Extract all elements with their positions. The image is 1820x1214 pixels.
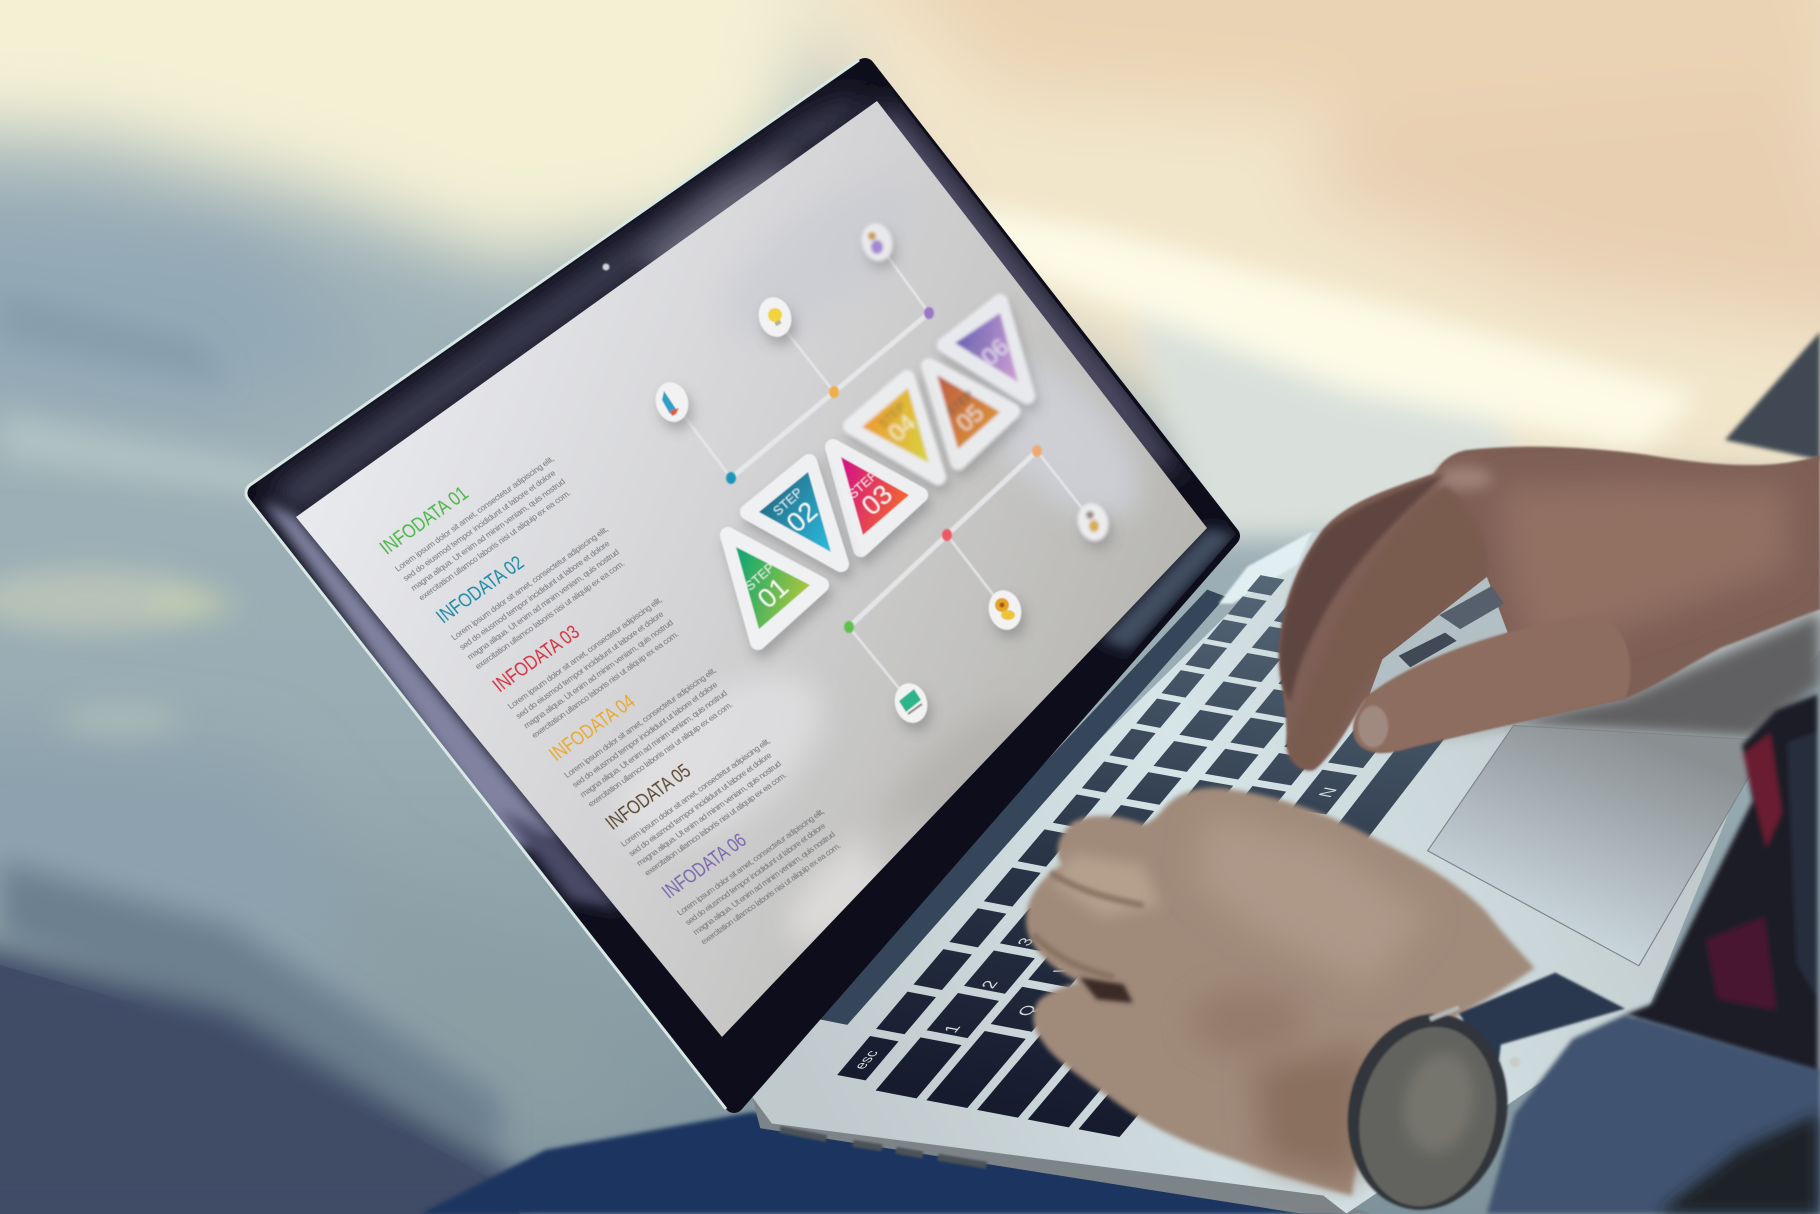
step 06 triangle (945, 302, 1027, 396)
watch (1330, 973, 1625, 1214)
text block: INFODATA 02: sed do eiusmod tempor incididunt ut labore et dolore (457, 538, 612, 652)
connector dots (726, 307, 1042, 633)
index finger (1287, 486, 1488, 770)
text block: INFODATA 05 (600, 713, 796, 878)
connector lines (672, 242, 1093, 703)
screen background (296, 101, 1207, 1037)
knuckle highlight (1437, 467, 1493, 490)
laptop base (752, 532, 1820, 1214)
icon badge: monitor (890, 680, 932, 726)
camera dot (602, 264, 610, 270)
blotch on back of hand (1192, 991, 1303, 1052)
row 5 keys (1037, 609, 1481, 1123)
clothing and hands (1026, 447, 1820, 1214)
step 05 triangle (929, 366, 1012, 462)
finger gap (1079, 977, 1133, 1003)
gap with keys between finger and thumb (1370, 577, 1508, 694)
hand shadow on deck (1404, 613, 1820, 743)
text block: INFODATA 01 (374, 431, 580, 602)
watch strap (1459, 973, 1625, 1074)
upper timeline (731, 313, 929, 478)
text block: INFODATA 02: magna aliqua. Ut enim ad minim veniam, quis nostrud (465, 547, 621, 661)
icon badge: yellow target (984, 587, 1026, 633)
text block: INFODATA 03: Lorem ipsum dolor sit amet, consectetur adipiscing elit, (506, 595, 664, 711)
dot: red (942, 529, 952, 541)
text block: INFODATA 03: magna aliqua. Ut enim ad minim veniam, quis nostrud (521, 617, 675, 730)
step 05 triangle: 05 (951, 399, 989, 437)
text block: INFODATA 04 (544, 643, 742, 809)
left hand (1026, 788, 1534, 1196)
screen soft smudges (622, 239, 1144, 953)
watch case (1330, 999, 1525, 1214)
trackpad (1428, 725, 1770, 966)
key labels: W (1049, 958, 1079, 975)
text block: INFODATA 01: Lorem ipsum dolor sit amet, consectetur adipiscing elit, (393, 454, 556, 573)
step 01 triangle: 01 (752, 572, 794, 614)
watch dial (1343, 1014, 1512, 1214)
deck surface (752, 532, 1820, 1214)
text block: INFODATA 04: sed do eiusmod tempor incididunt ut labore et dolore (570, 679, 720, 789)
plaid shirt (1625, 694, 1818, 1074)
text block: INFODATA 06 (656, 784, 850, 946)
sleeve (1487, 1014, 1820, 1214)
icon badge: rocket (651, 379, 693, 425)
lower timeline (849, 451, 1037, 627)
text block: INFODATA 01: magna aliqua. Ut enim ad minim veniam, quis nostrud (409, 476, 567, 593)
text block: INFODATA 03: exercitation ullamco laboris nisi ut aliquip ex ea com. (529, 629, 681, 740)
key labels: 3 (1012, 936, 1038, 947)
text block: INFODATA 02: Lorem ipsum dolor sit amet, consectetur adipiscing elit, (449, 524, 610, 642)
jeans (420, 1112, 1350, 1214)
text block: INFODATA 06: sed do eiusmod tempor incididunt ut labore et dolore (683, 820, 828, 927)
thumb nail (1358, 706, 1388, 747)
laptop screen (296, 101, 1207, 1037)
icon badge: person with purple shirt (858, 220, 896, 264)
silver rim (246, 60, 859, 1109)
text block: INFODATA 03: INFODATA 03 (489, 622, 584, 697)
bezel reflections (262, 100, 1236, 910)
laptop lid (246, 60, 1236, 1109)
dark ground base (0, 965, 520, 1214)
bench corner top right (1725, 332, 1820, 460)
text block: INFODATA 06: magna aliqua. Ut enim ad minim veniam, quis nostrud (691, 829, 837, 937)
key labels: 2 (976, 979, 1002, 990)
thumb (1353, 615, 1631, 752)
watch dial light (1395, 1045, 1484, 1160)
step 03 triangle: 03 (856, 479, 898, 521)
key labels: Q (1013, 1003, 1041, 1017)
key labels: 1 (939, 1023, 965, 1034)
lower stems (849, 451, 1093, 703)
hinge strip (807, 590, 1226, 1025)
step 01 triangle (728, 535, 821, 642)
text block: INFODATA 06: Lorem ipsum dolor sit amet, consectetur adipiscing elit, (675, 806, 826, 917)
text block: INFODATA 05: magna aliqua. Ut enim ad minim veniam, quis nostrud (634, 758, 783, 868)
side ports (780, 1129, 987, 1165)
row 3 keys (941, 590, 1380, 1104)
text block: INFODATA 04: exercitation ullamco laboris nisi ut aliquip ex ea com. (586, 699, 735, 809)
text block: INFODATA 02: exercitation ullamco laboris nisi ut aliquip ex ea com. (473, 558, 627, 671)
text block: INFODATA 02 (431, 502, 634, 671)
step 04 triangle: STEP (876, 399, 908, 431)
text block: INFODATA 05: INFODATA 05 (602, 760, 695, 834)
step 04 triangle: 04 (883, 409, 921, 447)
step 03 triangle: STEP (845, 468, 880, 502)
text block: INFODATA 06: INFODATA 06 (658, 830, 751, 903)
icon badge: light bulb (754, 294, 796, 340)
step 02 triangle: STEP (770, 485, 805, 519)
back of right hand highlight (1497, 482, 1787, 656)
text block: INFODATA 01: exercitation ullamco laboris nisi ut aliquip ex ea com. (416, 488, 573, 602)
left hand base (1026, 788, 1534, 1196)
text block: INFODATA 04: magna aliqua. Ut enim ad minim veniam, quis nostrud (578, 688, 729, 799)
step 01 triangle: STEP (742, 560, 777, 594)
slide text list (374, 431, 862, 946)
row 6 keys (1085, 618, 1532, 1133)
right hand base (1279, 447, 1820, 770)
dot: green (844, 621, 854, 633)
dot: light orange (1032, 445, 1042, 457)
step 02 triangle (748, 462, 841, 564)
text block: INFODATA 01: INFODATA 01 (376, 483, 473, 559)
watch lug highlight (1509, 1057, 1520, 1067)
finger creases (1033, 873, 1143, 977)
key labels: N (1314, 786, 1342, 799)
text block: INFODATA 05: exercitation ullamco laboris nisi ut aliquip ex ea com. (642, 770, 789, 878)
keys seen between fingers (1439, 586, 1504, 629)
finger highlight (1050, 853, 1161, 917)
step 05 triangle: STEP (944, 387, 976, 419)
text block: INFODATA 02: INFODATA 02 (432, 552, 529, 628)
step 02 triangle: 02 (781, 496, 823, 538)
dot: orange (829, 386, 839, 398)
row 1 keys (850, 572, 1278, 1078)
step 06 triangle: STEP (966, 327, 998, 359)
text block: INFODATA 04: INFODATA 04 (545, 691, 640, 765)
keyboard (837, 571, 1532, 1133)
far finger shadow (1280, 474, 1445, 702)
text block: INFODATA 05: sed do eiusmod tempor incididunt ut labore et dolore (626, 750, 774, 858)
text block: INFODATA 01: sed do eiusmod tempor incididunt ut labore et dolore (401, 468, 558, 583)
shadow on wrist side (1254, 1045, 1370, 1184)
row 2 keys (893, 581, 1329, 1094)
text block: INFODATA 05: Lorem ipsum dolor sit amet, consectetur adipiscing elit, (618, 736, 772, 849)
text block: INFODATA 03: sed do eiusmod tempor incididunt ut labore et dolore (513, 609, 666, 721)
text block: INFODATA 04: Lorem ipsum dolor sit amet, consectetur adipiscing elit, (562, 665, 718, 780)
right hand (1279, 447, 1820, 770)
step 06 triangle: 06 (976, 333, 1014, 371)
step 03 triangle (833, 447, 920, 549)
icon badge: person with chart (1074, 500, 1112, 544)
deck side edge (752, 1097, 1370, 1214)
upper stems (672, 242, 929, 478)
text block: INFODATA 03 (487, 572, 688, 740)
key labels: esc (851, 1049, 883, 1070)
row 4 keys (989, 600, 1430, 1114)
key labels (851, 747, 1342, 1109)
dot: blue (726, 472, 736, 484)
background stripes (0, 290, 230, 385)
dot: purple (924, 307, 934, 319)
knuckle highlight (1196, 812, 1428, 987)
lid bezel (256, 68, 1230, 1103)
step 04 triangle (851, 378, 938, 477)
text block: INFODATA 06: exercitation ullamco laboris nisi ut aliquip ex ea com. (699, 840, 842, 946)
